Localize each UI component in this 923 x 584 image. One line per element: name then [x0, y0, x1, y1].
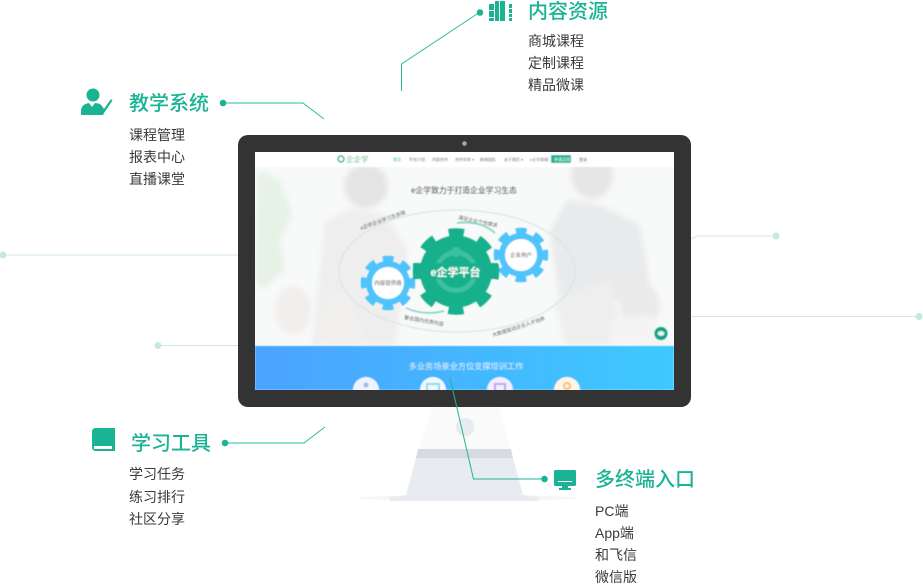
heading: 内容资源: 内容资源: [528, 0, 608, 23]
heading: 多终端入口: 多终端入口: [595, 468, 695, 491]
screen nav bar: [336, 152, 615, 167]
screen nav bar: 新闻团队: [480, 156, 496, 162]
monitor screen: [255, 151, 674, 403]
list: 多终端入口: [595, 503, 637, 584]
list: 学习工具: [129, 466, 185, 527]
screen background photo: [255, 167, 660, 344]
icon: monitor: [554, 470, 576, 490]
screen nav bar: 内容合作: [432, 156, 448, 162]
list: 内容资源: 商城课程: [528, 33, 584, 49]
list: 内容资源: 精品微课: [528, 77, 584, 93]
list: 教学系统: 课程管理: [129, 127, 185, 143]
screen nav bar: 企企学: [346, 154, 369, 164]
screen nav bar: 申请试用: [554, 156, 570, 162]
connector: 内容资源: [402, 9, 483, 91]
blue section: [255, 345, 674, 390]
screen nav bar: 合作伙伴 ▾: [455, 156, 474, 162]
connector: 多终端入口: [450, 378, 548, 482]
curved labels: 聚合国内优质内容: [404, 314, 444, 328]
list: 多终端入口: PC端: [595, 503, 628, 519]
screen nav bar: e企学商城: [530, 156, 548, 162]
chat bubble: [654, 327, 668, 340]
monitor frame: [238, 135, 691, 407]
monitor stand: [359, 407, 579, 501]
center gear: e企学平台: [413, 232, 498, 310]
right gear: 企业用户: 企业用户: [510, 251, 532, 259]
list: 教学系统: [129, 127, 185, 187]
screen nav bar: 首页: [393, 156, 401, 162]
icon: books: [489, 1, 512, 21]
screen nav bar: 平台介绍: [409, 156, 425, 162]
list: 学习工具: 社区分享: [129, 511, 185, 527]
connector: 教学系统: [220, 100, 324, 119]
list: 内容资源: [528, 33, 584, 93]
list: 学习工具: 学习任务: [129, 466, 185, 482]
screen nav bar: 登录: [579, 156, 587, 162]
list: 多终端入口: 和飞信: [595, 547, 637, 563]
center gear: e企学平台: e企学平台: [430, 265, 481, 279]
curved labels: 满足企业个性需求: [458, 214, 498, 229]
screen headline: e企学致力于打造企业学习生态: [411, 185, 517, 195]
list: 教学系统: 报表中心: [129, 149, 185, 165]
heading: 学习工具: 学习工具: [131, 432, 211, 455]
left gear: 内容提供商: 内容提供商: [374, 279, 402, 287]
blue section: 多业务场景全方位支撑培训工作: [409, 361, 523, 371]
connector: 学习工具: [222, 427, 325, 446]
right gear: 企业用户: [497, 231, 545, 279]
icon: teacher: [81, 88, 112, 115]
decorative pale connector lines: [0, 232, 922, 349]
heading: 教学系统: 教学系统: [129, 92, 209, 115]
curved arrows: [457, 222, 495, 233]
curved labels: 大数据驱动企业人才培养: [491, 315, 546, 339]
screen nav bar: 关于我们 ▾: [504, 156, 523, 162]
list: 教学系统: 直播课堂: [129, 171, 185, 187]
monitor camera: [462, 141, 467, 146]
list: 内容资源: 定制课程: [528, 55, 584, 71]
icon: book: [92, 428, 115, 451]
left gear: 内容提供商: [364, 259, 412, 307]
list: 学习工具: 练习排行: [129, 489, 185, 505]
curved labels: [359, 209, 546, 339]
curved labels: e企学企业学习生态链: [359, 209, 407, 232]
list: 多终端入口: App端: [595, 525, 634, 541]
ecosystem ellipse: [339, 210, 575, 332]
